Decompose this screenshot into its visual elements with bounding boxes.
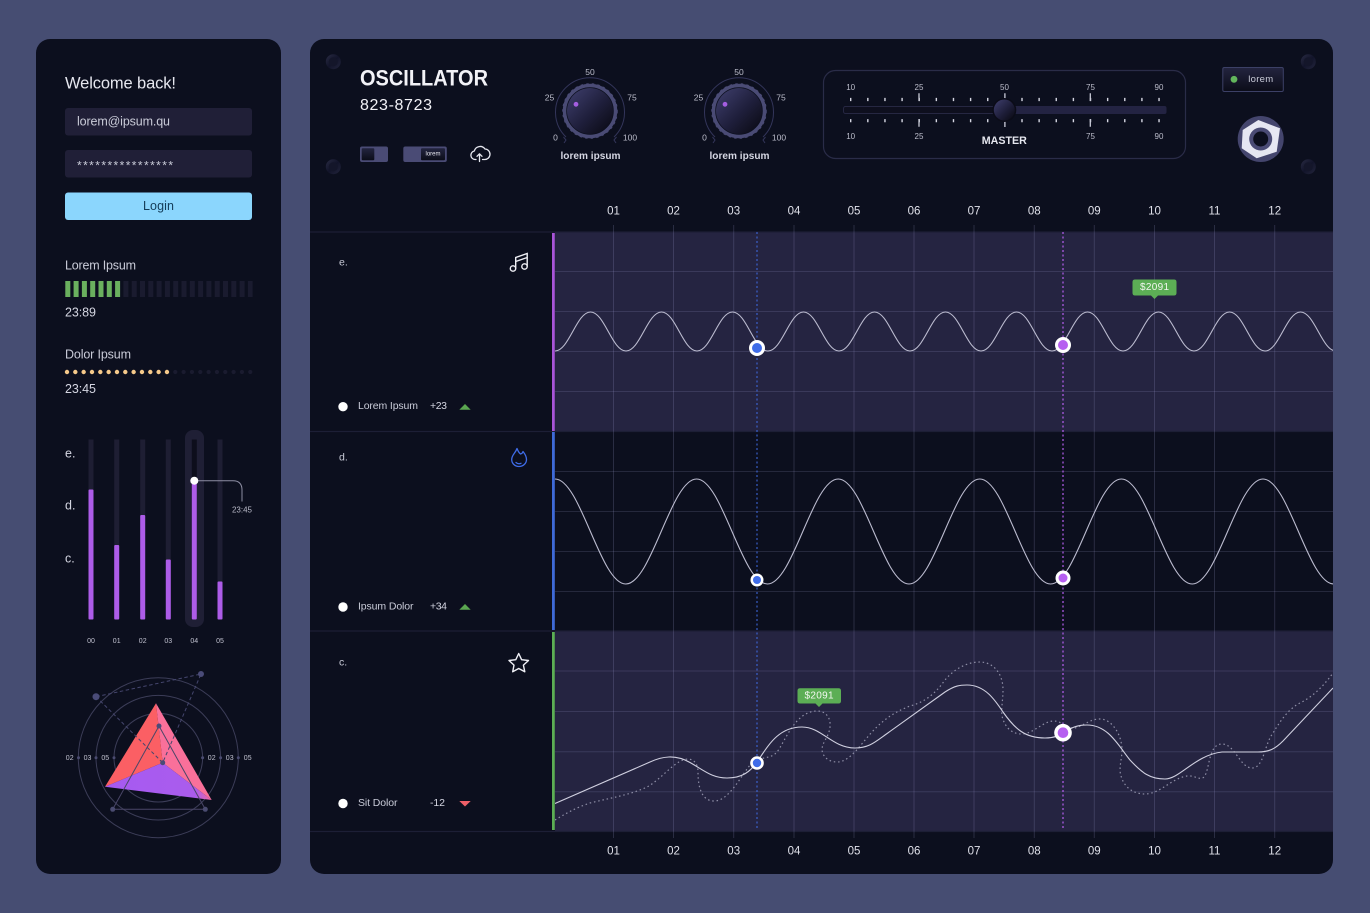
knob: right: 50 <box>734 67 744 77</box>
row d: wave <box>555 479 1334 584</box>
title: OSCILLATOR <box>360 66 488 91</box>
button: login: Login <box>143 199 174 213</box>
axis: bottom months: 05 <box>848 846 860 858</box>
meter: lorem ipsum: Lorem Ipsum <box>65 259 136 273</box>
bar chart: d. <box>65 499 75 513</box>
axis: top months: 06 <box>908 206 920 218</box>
radar chart: 05 <box>244 755 252 762</box>
screws <box>326 54 1316 174</box>
axis: top months <box>607 206 1281 218</box>
knob: left: 25 <box>545 93 554 103</box>
axis: bottom months: 02 <box>667 846 680 858</box>
axis: top months: 05 <box>848 206 860 218</box>
axis: top months: 04 <box>788 206 801 218</box>
axis: top months: 10 <box>1148 206 1161 218</box>
input: password: **************** <box>77 159 173 173</box>
panel: oscillator <box>310 39 1336 874</box>
master slider: 75 <box>1086 132 1095 141</box>
axis: bottom months: 09 <box>1088 846 1101 858</box>
knob: left: lorem ipsum <box>560 150 620 162</box>
knob: right <box>694 67 786 162</box>
row c: labels <box>338 632 555 830</box>
meter: dolor ipsum <box>65 348 252 396</box>
marker: row e blue <box>749 340 765 356</box>
toggle switch: lorem: lorem <box>425 151 441 157</box>
axis: top months: 12 <box>1268 206 1281 218</box>
master slider: 75 <box>1086 83 1095 92</box>
bar chart: 04 <box>190 638 198 645</box>
icon: star <box>509 654 528 672</box>
bar chart <box>65 430 253 645</box>
master slider: 25 <box>915 132 924 141</box>
button: lorem: lorem <box>1248 74 1273 85</box>
axis: bottom months: 07 <box>968 846 980 858</box>
toggle switch: lorem <box>403 146 447 162</box>
icon: music note <box>510 254 527 271</box>
row c: curve dotted <box>555 662 1333 820</box>
row e: labels <box>338 233 555 431</box>
radar chart: 03 <box>226 755 234 762</box>
axis: top months: 09 <box>1088 206 1101 218</box>
axis: bottom months: 08 <box>1028 846 1041 858</box>
bar chart: e. <box>65 447 75 461</box>
master slider <box>824 70 1186 158</box>
input: email <box>65 108 252 136</box>
radar chart: 02 <box>208 755 216 762</box>
axis: bottom months: 01 <box>607 846 620 858</box>
row c: labels: c. <box>339 657 347 669</box>
knob: left: 50 <box>585 67 595 77</box>
panel: login sidebar <box>36 39 281 874</box>
row d: labels: +34 <box>430 601 447 613</box>
chart rows background <box>310 232 1333 832</box>
master slider: 90 <box>1155 83 1164 92</box>
knob: left <box>545 67 637 162</box>
axis: top months: 02 <box>667 206 680 218</box>
knob: right: 0 <box>702 133 707 143</box>
radar chart <box>66 671 252 838</box>
meter: dolor ipsum: 23:45 <box>65 382 96 396</box>
radar chart: 05 <box>101 755 109 762</box>
axis: bottom months: 12 <box>1268 846 1281 858</box>
axis: top months: 08 <box>1028 206 1041 218</box>
row e: labels: Lorem Ipsum <box>358 400 418 412</box>
knob: left: 0 <box>553 133 558 143</box>
row c: curve solid <box>555 685 1333 804</box>
dashed marker line: purple <box>1062 232 1064 828</box>
row d: labels: Ipsum Dolor <box>358 601 414 613</box>
axis: bottom months: 03 <box>727 846 740 858</box>
axis: bottom months <box>607 846 1281 858</box>
marker: row e purple <box>1055 337 1071 353</box>
meter: lorem ipsum <box>65 259 253 320</box>
dashed marker line: blue <box>756 232 758 828</box>
subtitle number: 823-8723 <box>360 97 432 114</box>
master slider: 50 <box>1000 83 1009 92</box>
toggle switch <box>360 146 388 162</box>
bar chart: c. <box>65 552 75 566</box>
input: email: lorem@ipsum.qu <box>77 115 170 129</box>
input: password <box>65 150 252 178</box>
tooltip: row e <box>1132 280 1176 299</box>
icon: cloud upload <box>471 146 490 162</box>
tooltip: row c: $2091 <box>804 691 834 702</box>
bar chart: 23:45 <box>232 506 253 515</box>
master slider: 10 <box>846 83 856 92</box>
axis: top months: 11 <box>1209 206 1220 218</box>
button: lorem <box>1223 68 1283 92</box>
icon: flame <box>512 448 526 466</box>
marker: row c blue <box>750 756 764 770</box>
marker: row d blue <box>750 574 764 586</box>
knob: right: 25 <box>694 93 703 103</box>
tooltip: row e: $2091 <box>1140 282 1169 293</box>
heading: welcome back: Welcome back! <box>65 75 176 93</box>
bar chart: 05 <box>216 638 224 645</box>
knob: right: 100 <box>772 133 786 143</box>
axis: bottom months: 06 <box>908 846 920 858</box>
bar chart: 03 <box>164 638 172 645</box>
marker: row c purple <box>1054 724 1072 742</box>
meter: dolor ipsum: Dolor Ipsum <box>65 348 131 362</box>
radar chart: 02 <box>66 755 74 762</box>
master slider: 25 <box>915 83 924 92</box>
tooltip: row c <box>798 688 841 707</box>
axis: top months: 07 <box>968 206 980 218</box>
axis: bottom months: 11 <box>1209 846 1220 858</box>
axis: bottom months: 04 <box>788 846 801 858</box>
button: login <box>65 192 252 220</box>
row c: labels: -12 <box>430 797 445 809</box>
bar chart: 02 <box>139 638 147 645</box>
meter: lorem ipsum: 23:89 <box>65 306 96 320</box>
master slider: 90 <box>1155 132 1164 141</box>
axis: bottom months: 10 <box>1148 846 1161 858</box>
marker: row d purple <box>1056 570 1070 586</box>
row d: labels: d. <box>339 452 348 464</box>
axis: top months: 03 <box>727 206 740 218</box>
knob: right: lorem ipsum <box>710 150 770 162</box>
jack socket <box>1238 116 1284 162</box>
row e: wave <box>555 312 1336 351</box>
row e: labels: e. <box>339 257 348 269</box>
knob: left: 100 <box>623 133 637 143</box>
knob: left: 75 <box>627 93 637 103</box>
row e: labels: +23 <box>430 400 447 412</box>
master slider: 10 <box>846 132 856 141</box>
axis: top months: 01 <box>607 206 620 218</box>
row c: labels: Sit Dolor <box>358 797 398 809</box>
bar chart: 01 <box>113 638 121 645</box>
radar chart: 03 <box>84 755 91 762</box>
bar chart: 00 <box>87 638 95 645</box>
master slider: MASTER <box>982 135 1027 147</box>
row d: labels <box>338 432 555 630</box>
knob: right: 75 <box>776 93 786 103</box>
